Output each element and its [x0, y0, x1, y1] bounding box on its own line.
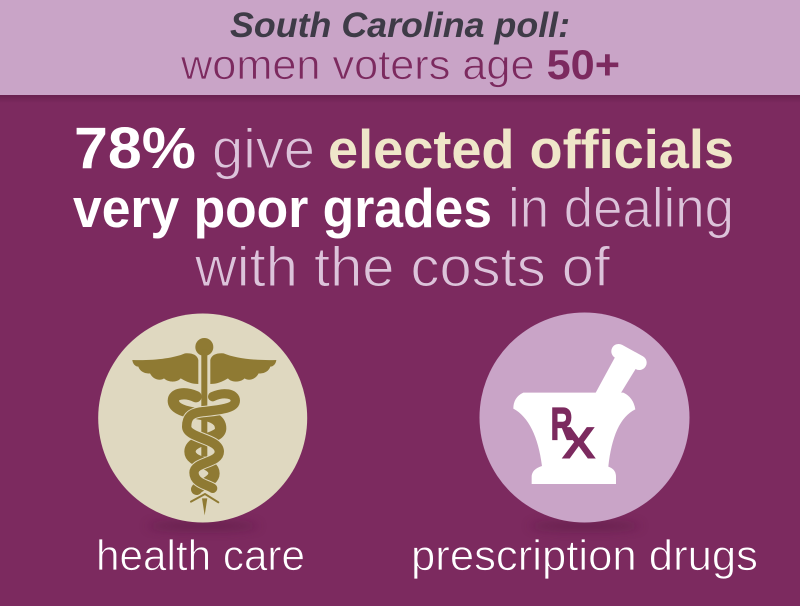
- icon: caduceus in circle: [98, 314, 307, 522]
- item: health care: [96, 314, 307, 580]
- headline statement: elected officials: [328, 118, 734, 180]
- headline statement: with the costs of: [194, 235, 610, 298]
- headline statement: in dealing: [508, 176, 734, 239]
- panel: header band: [0, 0, 800, 95]
- icon: mortar and pestle in circle: R: [551, 398, 573, 449]
- subheading: women voters age 50+: women voters age 50+: [180, 41, 620, 88]
- headline statement: [73, 116, 734, 298]
- heading: South Carolina poll: South Carolina poll:: [230, 6, 570, 45]
- headline statement: very poor grades: [73, 177, 492, 239]
- item: prescription drugs: [411, 312, 758, 580]
- headline statement: give: [212, 117, 315, 180]
- icon: mortar and pestle in circle: [480, 312, 690, 522]
- label: prescription drugs: prescription drugs: [411, 532, 758, 580]
- label: health care: health care: [96, 532, 305, 580]
- headline statement: 78%: [74, 116, 196, 181]
- icon: mortar and pestle in circle: X: [561, 417, 596, 468]
